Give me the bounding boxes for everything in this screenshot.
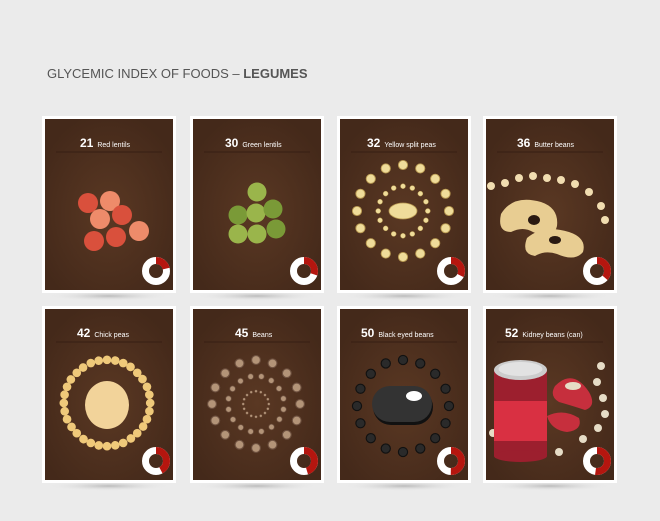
card: black eyed beans	[337, 306, 471, 491]
card: red lentils	[42, 116, 176, 301]
icon: chick peas	[51, 347, 163, 459]
label: 36 Butter beans: 36 Butter beans	[517, 136, 575, 150]
card: chick peas	[42, 306, 176, 491]
icon: beans	[208, 356, 304, 452]
card: beans	[190, 306, 324, 491]
card: green lentils	[190, 116, 324, 301]
donut: 52	[586, 450, 608, 472]
donut: 30	[294, 260, 314, 282]
icon: black eyed beans	[352, 355, 454, 457]
label: 50 Black eyed beans: 50 Black eyed beans	[361, 326, 434, 340]
donut: 21	[146, 260, 166, 282]
card: butter beans	[483, 116, 617, 301]
title: GLYCEMIC INDEX OF FOODS – LEGUMES	[47, 66, 308, 81]
label: 30 Green lentils: 30 Green lentils	[225, 136, 282, 150]
icon: kidney beans and can	[489, 360, 609, 462]
icon: butter beans	[487, 172, 609, 258]
label: 32 Yellow split peas: 32 Yellow split peas	[367, 136, 436, 150]
donut: 32	[440, 260, 462, 282]
donut: 50	[440, 450, 462, 472]
label: 52 Kidney beans (can): 52 Kidney beans (can)	[505, 326, 583, 340]
donut: 36	[586, 260, 608, 282]
icon: red lentils	[78, 191, 149, 251]
donut: 42	[146, 450, 166, 472]
donut: 45	[294, 450, 314, 472]
icon: green lentils	[228, 182, 286, 244]
icon: split peas ring	[352, 160, 454, 262]
label: 42 Chick peas: 42 Chick peas	[77, 326, 129, 340]
card: yellow split peas	[337, 116, 471, 301]
label: 45 Beans: 45 Beans	[235, 326, 273, 340]
card: kidney beans can	[483, 306, 617, 491]
label: 21 Red lentils: 21 Red lentils	[80, 136, 131, 150]
